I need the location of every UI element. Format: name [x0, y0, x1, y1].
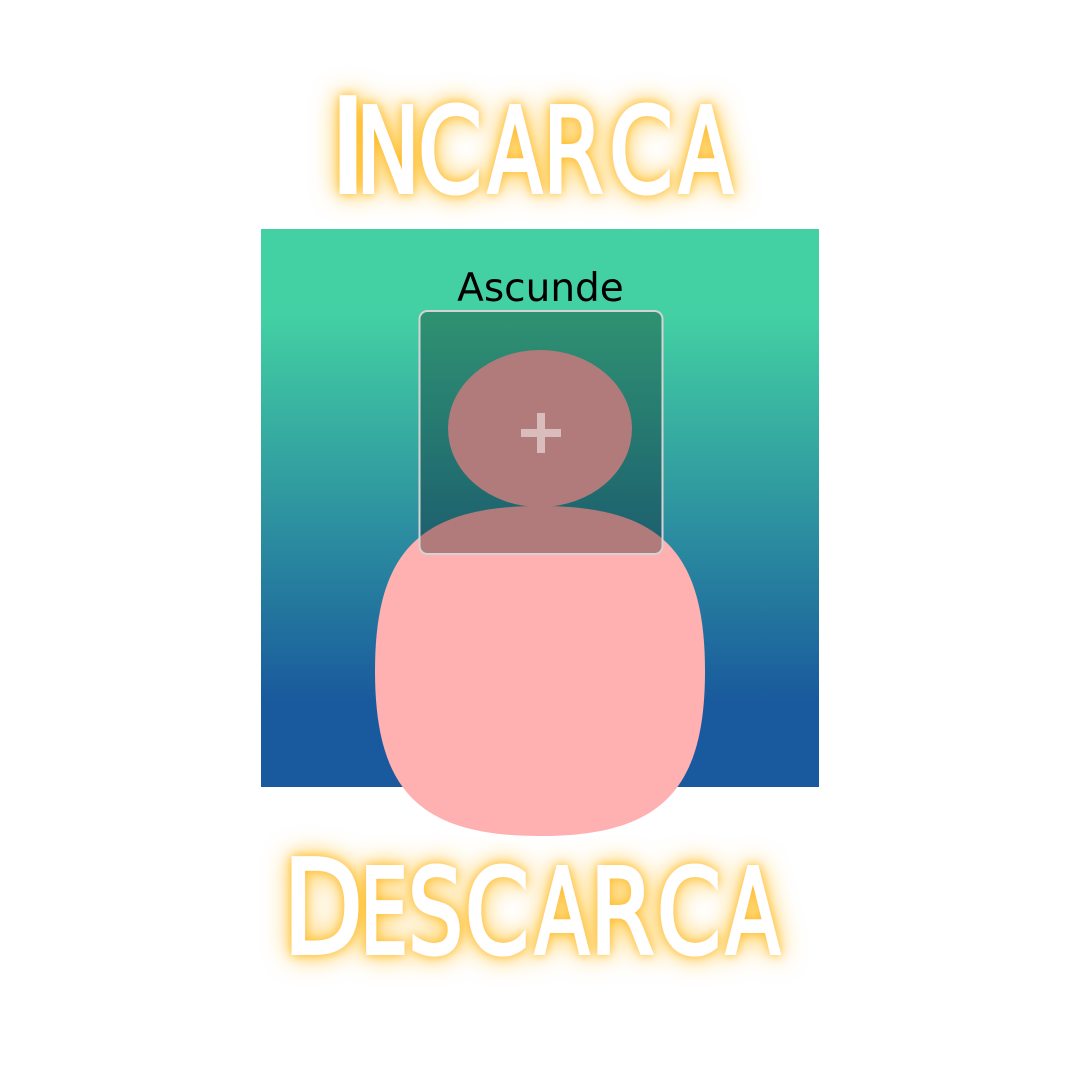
- title: Descarca: D: [283, 832, 363, 984]
- button: translucent hide box: [420, 311, 662, 554]
- title: Descarca: A: [726, 843, 780, 981]
- title: Incarca: N: [356, 82, 420, 220]
- title: Incarca: I: [329, 71, 367, 223]
- title: Descarca: C: [657, 843, 721, 981]
- title: Incarca: R: [543, 82, 603, 220]
- title: Descarca: [283, 832, 780, 984]
- figure: pink head: [448, 350, 632, 507]
- figure: pink body: [375, 506, 705, 836]
- title: Descarca: A: [535, 843, 589, 981]
- title: Incarca: C: [418, 82, 482, 220]
- title: Incarca: [329, 71, 733, 223]
- title: Incarca: A: [488, 82, 542, 220]
- panel: gradient square: [261, 229, 819, 787]
- title: Descarca: R: [590, 843, 654, 981]
- title: Descarca: C: [465, 843, 529, 981]
- title: Incarca: C: [609, 82, 673, 220]
- title: Descarca: S: [408, 843, 463, 981]
- label: Ascunde: Ascunde: [457, 266, 624, 311]
- title: Incarca: A: [679, 82, 733, 220]
- icon: plus: [521, 413, 561, 453]
- title: Descarca: E: [360, 843, 408, 981]
